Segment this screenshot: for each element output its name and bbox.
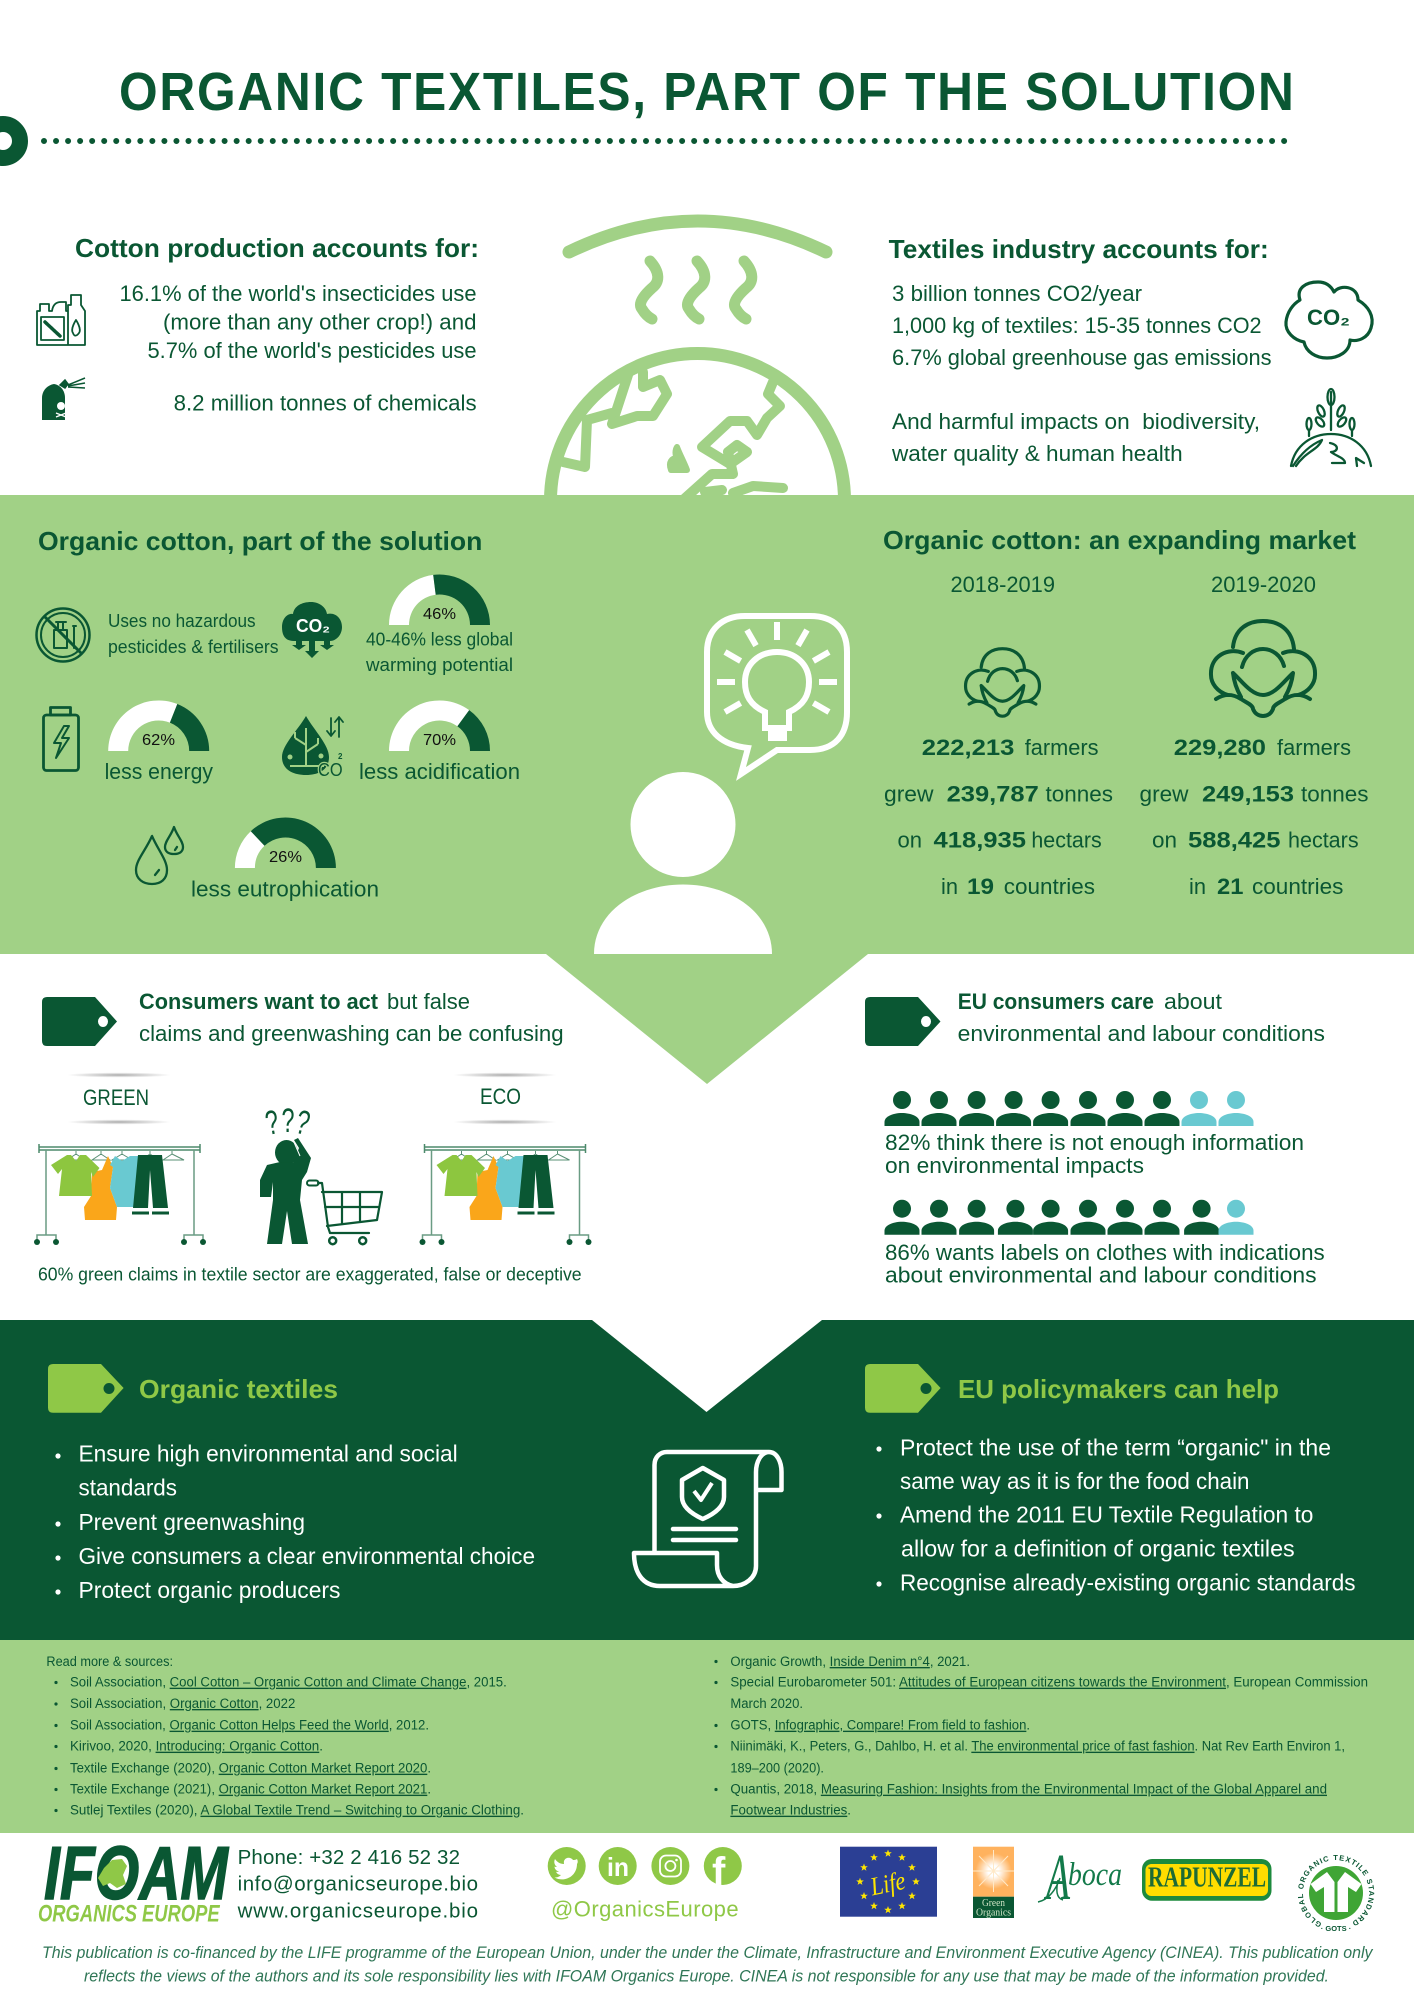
chart: gauge 70% [389, 700, 490, 751]
column: 2019-2020: 588,425 [1188, 828, 1280, 853]
column: 2018-2019: 222,213 [922, 735, 1014, 760]
column: 2019-2020: 2019-2020 [1211, 572, 1316, 597]
text: sources left column: Textile Exchange (2020), Organic Cotton Market Report 2020. [70, 1761, 431, 1776]
icon: certified document scroll [634, 1452, 782, 1586]
logo: Aboca: A [1044, 1841, 1070, 1914]
title marker with dotted rule [0, 124, 1285, 158]
list: organic textiles benefits: Give consumers a clear environmental choice [78, 1543, 535, 1569]
heading text: consumers: but false [387, 989, 470, 1014]
text: sources right column: 189–200 (2020). [730, 1761, 824, 1776]
text: 86% statistic [885, 1240, 1325, 1288]
title: ORGANIC TEXTILES, PART OF THE SOLUTION [119, 61, 1294, 121]
text: cotton production facts: 8.2 million tonnes of chemicals [174, 390, 477, 416]
globe outline [550, 354, 844, 648]
chart: gauge 62%: 62% [142, 732, 175, 749]
list: policy recommendations: Amend the 2011 EU Textile Regulation to [900, 1502, 1313, 1528]
list: policy recommendations [876, 1435, 1356, 1596]
label: less energy: less energy [105, 759, 214, 784]
text: funding disclaimer: reflects the views of the authors and its sole responsibility lies with IFOAM Organics Europe. CINEA is not responsible for any use that may be made of the information provided. [84, 1967, 1329, 1986]
text: sources right column [714, 1654, 1368, 1818]
text: social handle: @OrganicsEurope [551, 1897, 739, 1922]
icon: spray can [42, 378, 85, 420]
logo: Aboca: boca [1068, 1857, 1122, 1893]
illustration: clothes rack eco [420, 1144, 592, 1245]
heading text: consumers: Consumers want to act [139, 989, 378, 1014]
chart: gauge 46%: 46% [423, 606, 456, 623]
icon: twitter [548, 1847, 586, 1885]
column: 2018-2019: 239,787 [947, 782, 1039, 807]
list: organic textiles benefits: Ensure high environmental and social [78, 1441, 458, 1467]
icon: battery [44, 708, 78, 770]
column: 2019-2020: countries [1252, 874, 1343, 899]
text: global warming potential: 40-46% less global [366, 630, 513, 650]
heading: organic textiles: Organic textiles [139, 1374, 338, 1404]
column: 2018-2019 [884, 572, 1113, 899]
panel: sources background [0, 1640, 1414, 1833]
atmosphere arc [569, 221, 826, 252]
text: sources right column: Niinimäki, K., Peters, G., Dahlbo, H. et al. The environmental price of fast fashion. Nat Rev Earth Environ 1, [730, 1739, 1345, 1754]
text: sources left column: Soil Association, Organic Cotton, 2022 [70, 1696, 295, 1711]
column: 2019-2020: on [1152, 828, 1177, 853]
text: sources right column: Quantis, 2018, Measuring Fashion: Insights from the Environmental Impact of the Global Apparel and [730, 1782, 1327, 1797]
chart: 82% people pictogram [884, 1091, 1254, 1126]
text: sources left column: Sutlej Textiles (2020), A Global Textile Trend – Switching to Organic Clothing. [70, 1803, 524, 1818]
list: organic textiles benefits: Prevent greenwashing [78, 1509, 305, 1535]
text: sources right column: Footwear Industries. [730, 1803, 851, 1818]
text: sources right column: March 2020. [730, 1696, 803, 1711]
list: policy recommendations: allow for a definition of organic textiles [901, 1536, 1295, 1562]
icon: lime price tag [865, 1364, 941, 1413]
column: 2018-2019: on [898, 828, 922, 853]
icon: no pesticides [36, 608, 90, 662]
text: sources left column: Soil Association, Cool Cotton – Organic Cotton and Climate Change, 2015. [70, 1675, 507, 1690]
chart: gauge 26%: 26% [269, 849, 302, 866]
column: 2018-2019: countries [1004, 874, 1095, 899]
panel: dark green band with notch [0, 1320, 1414, 1640]
icon: CO2 cloud: CO₂ [1307, 305, 1350, 330]
person shoulders [594, 884, 772, 954]
column: 2019-2020: hectars [1288, 828, 1359, 853]
text: green claims statistic: 60% green claims in textile sector are exaggerated, false or deceptive [38, 1265, 582, 1285]
chart: gauge 70%: 70% [423, 732, 456, 749]
icon: dark price tag [865, 997, 940, 1046]
label: GREEN: GREEN [83, 1085, 149, 1110]
logo: EU LIFE [840, 1847, 937, 1917]
icon: linkedin [599, 1847, 637, 1885]
heading text: EU consumers [958, 989, 1325, 1046]
text: sources left column: Kirivoo, 2020, Introducing: Organic Cotton. [70, 1739, 323, 1754]
panel: textiles industry [889, 234, 1372, 466]
text: no hazardous pesticides: pesticides & fertilisers [108, 637, 279, 657]
panel: EU consumers care [865, 989, 1325, 1288]
text: textiles industry facts [891, 281, 1272, 466]
text: funding disclaimer [42, 1943, 1374, 1986]
list: organic textiles benefits: Protect organic producers [78, 1577, 340, 1603]
panel: organic cotton solution [36, 526, 520, 902]
logo: Aboca [1038, 1841, 1122, 1914]
text: no hazardous pesticides: Uses no hazardous [108, 611, 256, 631]
heading text: consumers [139, 989, 564, 1046]
text: 82% statistic: on environmental impacts [885, 1153, 1144, 1178]
logo: IFOAM Organics Europe [38, 1831, 229, 1928]
label: ECO [453, 1072, 557, 1124]
column: 2018-2019: 19 [967, 874, 994, 899]
logo: EU LIFE: Life [867, 1866, 908, 1902]
logo: GOTS: GLOBAL ORGANIC TEXTILE STANDARD [1298, 1855, 1374, 1927]
icon: facebook [704, 1847, 742, 1894]
column: 2019-2020 [1140, 572, 1368, 899]
text: sources left column: Read more & sources: [46, 1654, 173, 1669]
text: 82% statistic [885, 1130, 1304, 1178]
illustration: confused shopper [260, 1102, 382, 1244]
globe land [563, 372, 783, 500]
column: 2018-2019: 418,935 [934, 828, 1026, 853]
text: textiles industry facts: water quality & human health [891, 441, 1183, 466]
heading: EU policymakers: EU policymakers can help [958, 1374, 1279, 1404]
heading: cotton production: Cotton production accounts for: [75, 233, 479, 263]
chart: gauge 26% [235, 817, 336, 868]
column: 2018-2019: tonnes [1046, 782, 1113, 807]
illustration: confused shopper: ? [292, 1103, 314, 1143]
list: organic textiles benefits [55, 1441, 535, 1603]
social media icons [548, 1847, 742, 1894]
panel: light green band with arrow [0, 495, 1414, 1084]
text: sources right column: Organic Growth, Inside Denim n°4, 2021. [730, 1654, 970, 1669]
icon: person with idea bubble [594, 616, 847, 954]
logo: Rapunzel: RAPUNZEL [1148, 1863, 1266, 1894]
text: sources right column: Special Eurobarometer 501: Attitudes of European citizens towards the Environment, European Commission [730, 1675, 1368, 1690]
text: global warming potential: warming potential [365, 655, 513, 675]
heading text: EU consumers: EU consumers care [958, 989, 1154, 1014]
icon: CO2 reduction cloud: CO₂ [296, 616, 330, 636]
label: ECO: ECO [480, 1084, 521, 1109]
column: 2018-2019: in [941, 874, 958, 899]
column: 2019-2020: grew [1140, 782, 1189, 807]
list: policy recommendations: same way as it is for the food chain [900, 1468, 1250, 1494]
column: 2018-2019: 2018-2019 [950, 572, 1055, 597]
column: 2018-2019: hectars [1031, 828, 1102, 853]
chart: gauge 46% [389, 575, 490, 625]
icon: acidification drop [282, 716, 343, 780]
text: contact details: www.organicseurope.bio [237, 1900, 478, 1923]
chart: gauge 62% [108, 700, 209, 751]
heading text: consumers: claims and greenwashing can be confusing [139, 1021, 564, 1046]
logo: Rapunzel [1142, 1859, 1272, 1901]
text: 86% statistic: 86% wants labels on clothes with indications [885, 1240, 1325, 1265]
list: policy recommendations: Protect the use of the term “organic" in the [900, 1435, 1331, 1461]
text: sources left column: Textile Exchange (2021), Organic Cotton Market Report 2021. [70, 1782, 431, 1797]
icon: facebook: f [712, 1850, 726, 1894]
icon: acidification drop: CO [318, 760, 343, 780]
heading: expanding market: Organic cotton: an expanding market [883, 525, 1356, 555]
logo: Green Organics: Organics [976, 1906, 1011, 1918]
icon: CO2 cloud [1286, 282, 1372, 358]
text: sources left column [46, 1654, 524, 1818]
label: less eutrophication: less eutrophication [191, 877, 379, 902]
illustration: clothes rack green [34, 1144, 206, 1245]
icon: CO2 reduction cloud [282, 602, 342, 658]
heading text: EU consumers: environmental and labour conditions [958, 1021, 1325, 1046]
text: 82% statistic: 82% think there is not enough information [885, 1130, 1304, 1155]
text: textiles industry facts: 3 billion tonnes CO2/year [892, 281, 1142, 306]
icon: linkedin: in [607, 1852, 629, 1882]
chart: 86% people pictogram [884, 1200, 1254, 1235]
column: 2018-2019: grew [884, 782, 934, 807]
column: 2019-2020: 249,153 [1202, 782, 1294, 807]
text: 86% statistic: about environmental and labour conditions [885, 1263, 1317, 1288]
icon: dark price tag [42, 997, 117, 1046]
panel: consumers want to act [34, 989, 592, 1285]
logo: IFOAM Organics Europe: IFOAM [44, 1831, 229, 1915]
speech bubble with light bulb [707, 616, 847, 774]
icon: warming earth [550, 221, 844, 648]
text: contact details: info@organicseurope.bio [238, 1873, 478, 1896]
logo: IFOAM Organics Europe: ORGANICS EUROPE [38, 1901, 220, 1928]
label: GREEN [67, 1072, 171, 1124]
text: sources right column: GOTS, Infographic, Compare! From field to fashion. [730, 1718, 1030, 1733]
text: no hazardous pesticides [108, 611, 279, 657]
icon: pesticide bottles [37, 295, 85, 345]
text: cotton production facts: (more than any other crop!) and [163, 310, 476, 334]
column: 2019-2020: tonnes [1301, 782, 1368, 807]
text: cotton production facts [120, 281, 477, 416]
panel: cotton production [37, 233, 479, 420]
illustration: confused shopper: ? [262, 1103, 282, 1143]
logo: Green Organics: Green [982, 1897, 1005, 1909]
text: contact details: Phone: +32 2 416 52 32 [238, 1846, 460, 1869]
icon: plant on globe [1291, 389, 1371, 466]
text: global warming potential [365, 630, 513, 675]
column: 2019-2020: 21 [1217, 874, 1243, 899]
text: cotton production facts: 5.7% of the world's pesticides use [148, 338, 476, 363]
person head [630, 772, 736, 877]
heading text: EU consumers: about [1164, 989, 1223, 1014]
column: 2019-2020: farmers [1277, 735, 1351, 760]
heading: textiles industry: Textiles industry accounts for: [889, 234, 1269, 264]
icon: acidification drop: 2 [338, 752, 343, 761]
illustration: confused shopper: ? [282, 1102, 294, 1140]
logo: GOTS: · GOTS · [1321, 1924, 1351, 1933]
panel: organic textiles [48, 1364, 535, 1603]
logo: Green Organics [973, 1847, 1014, 1918]
text: textiles industry facts: 1,000 kg of textiles: 15-35 tonnes CO2 [892, 313, 1262, 338]
text: textiles industry facts: 6.7% global greenhouse gas emissions [892, 345, 1272, 370]
icon: lime price tag [48, 1364, 124, 1413]
text: contact details [237, 1846, 478, 1923]
icon: water drops [136, 827, 183, 884]
text: sources left column: Soil Association, Organic Cotton Helps Feed the World, 2012. [70, 1718, 429, 1733]
list: organic textiles benefits: standards [78, 1475, 177, 1501]
heading: organic cotton solution: Organic cotton, part of the solution [38, 526, 482, 556]
icon: large cotton boll [1211, 621, 1315, 716]
column: 2018-2019: farmers [1025, 735, 1098, 760]
text: cotton production facts: 16.1% of the world's insecticides use [120, 281, 476, 306]
icon: small cotton boll [966, 649, 1039, 716]
list: policy recommendations: Recognise already-existing organic standards [900, 1570, 1356, 1596]
panel: EU policymakers [865, 1364, 1356, 1596]
text: textiles industry facts: And harmful impacts on biodiversity, [892, 409, 1260, 434]
heat waves [640, 261, 752, 319]
icon: instagram [651, 1847, 689, 1885]
panel: expanding market [883, 525, 1368, 899]
column: 2019-2020: in [1189, 874, 1206, 899]
column: 2019-2020: 229,280 [1174, 735, 1266, 760]
label: less acidification: less acidification [359, 759, 520, 784]
